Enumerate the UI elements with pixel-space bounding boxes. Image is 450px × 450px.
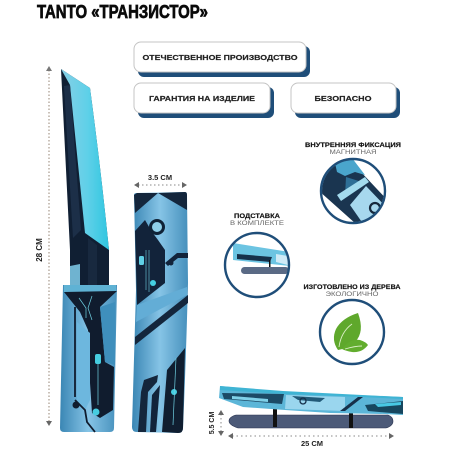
badge: warranty: ГАРАНТИЯ НА ИЗДЕЛИЕ [149, 94, 255, 103]
feature: internal magnetic lock: МАГНИТНАЯ [330, 150, 376, 156]
badge: warranty [134, 83, 274, 118]
icon: lock detail circle [320, 158, 386, 224]
blade [61, 69, 109, 285]
feature: made of wood [304, 284, 401, 364]
dimension: stand height 5.5 cm [209, 410, 224, 436]
sheath [132, 192, 188, 433]
dimension: sheath width 3.5 cm: 3.5 CM [148, 173, 172, 182]
badge: safe [291, 83, 400, 118]
icon: stand detail circle [225, 233, 290, 297]
handle [60, 285, 117, 432]
feature: stand included [225, 213, 290, 297]
feature: made of wood: ЭКОЛОГИЧНО [326, 292, 379, 298]
dimension: knife height 28 cm: 28 CM [35, 238, 44, 262]
feature: made of wood: ИЗГОТОВЛЕНО ИЗ ДЕРЕВА [304, 284, 401, 291]
dimension: sheath width 3.5 cm [134, 173, 187, 188]
dimension: stand height 5.5 cm: 5.5 CM [209, 412, 216, 434]
stand with knife [219, 386, 403, 428]
badge: domestic production: ОТЕЧЕСТВЕННОЕ ПРОИЗВОДСТВО [142, 53, 298, 62]
feature: stand included: В КОМПЛЕКТЕ [230, 221, 284, 227]
icon: leaves [320, 300, 384, 364]
feature: stand included: ПОДСТАВКА [234, 213, 281, 220]
badge: domestic production [134, 42, 310, 77]
title: TANTO «ТРАНЗИСТОР» [37, 2, 208, 22]
dimension: stand width 25 cm [228, 433, 394, 448]
badge: safe: БЕЗОПАСНО [314, 94, 372, 103]
dimension: knife height 28 cm [35, 66, 52, 426]
horizontal knife [219, 386, 403, 415]
stand base [229, 415, 393, 428]
feature: internal magnetic lock [305, 142, 402, 232]
feature: internal magnetic lock: ВНУТРЕННЯЯ ФИКСАЦИЯ [305, 142, 402, 149]
dimension: stand width 25 cm: 25 CM [301, 439, 323, 448]
knife [60, 69, 117, 432]
